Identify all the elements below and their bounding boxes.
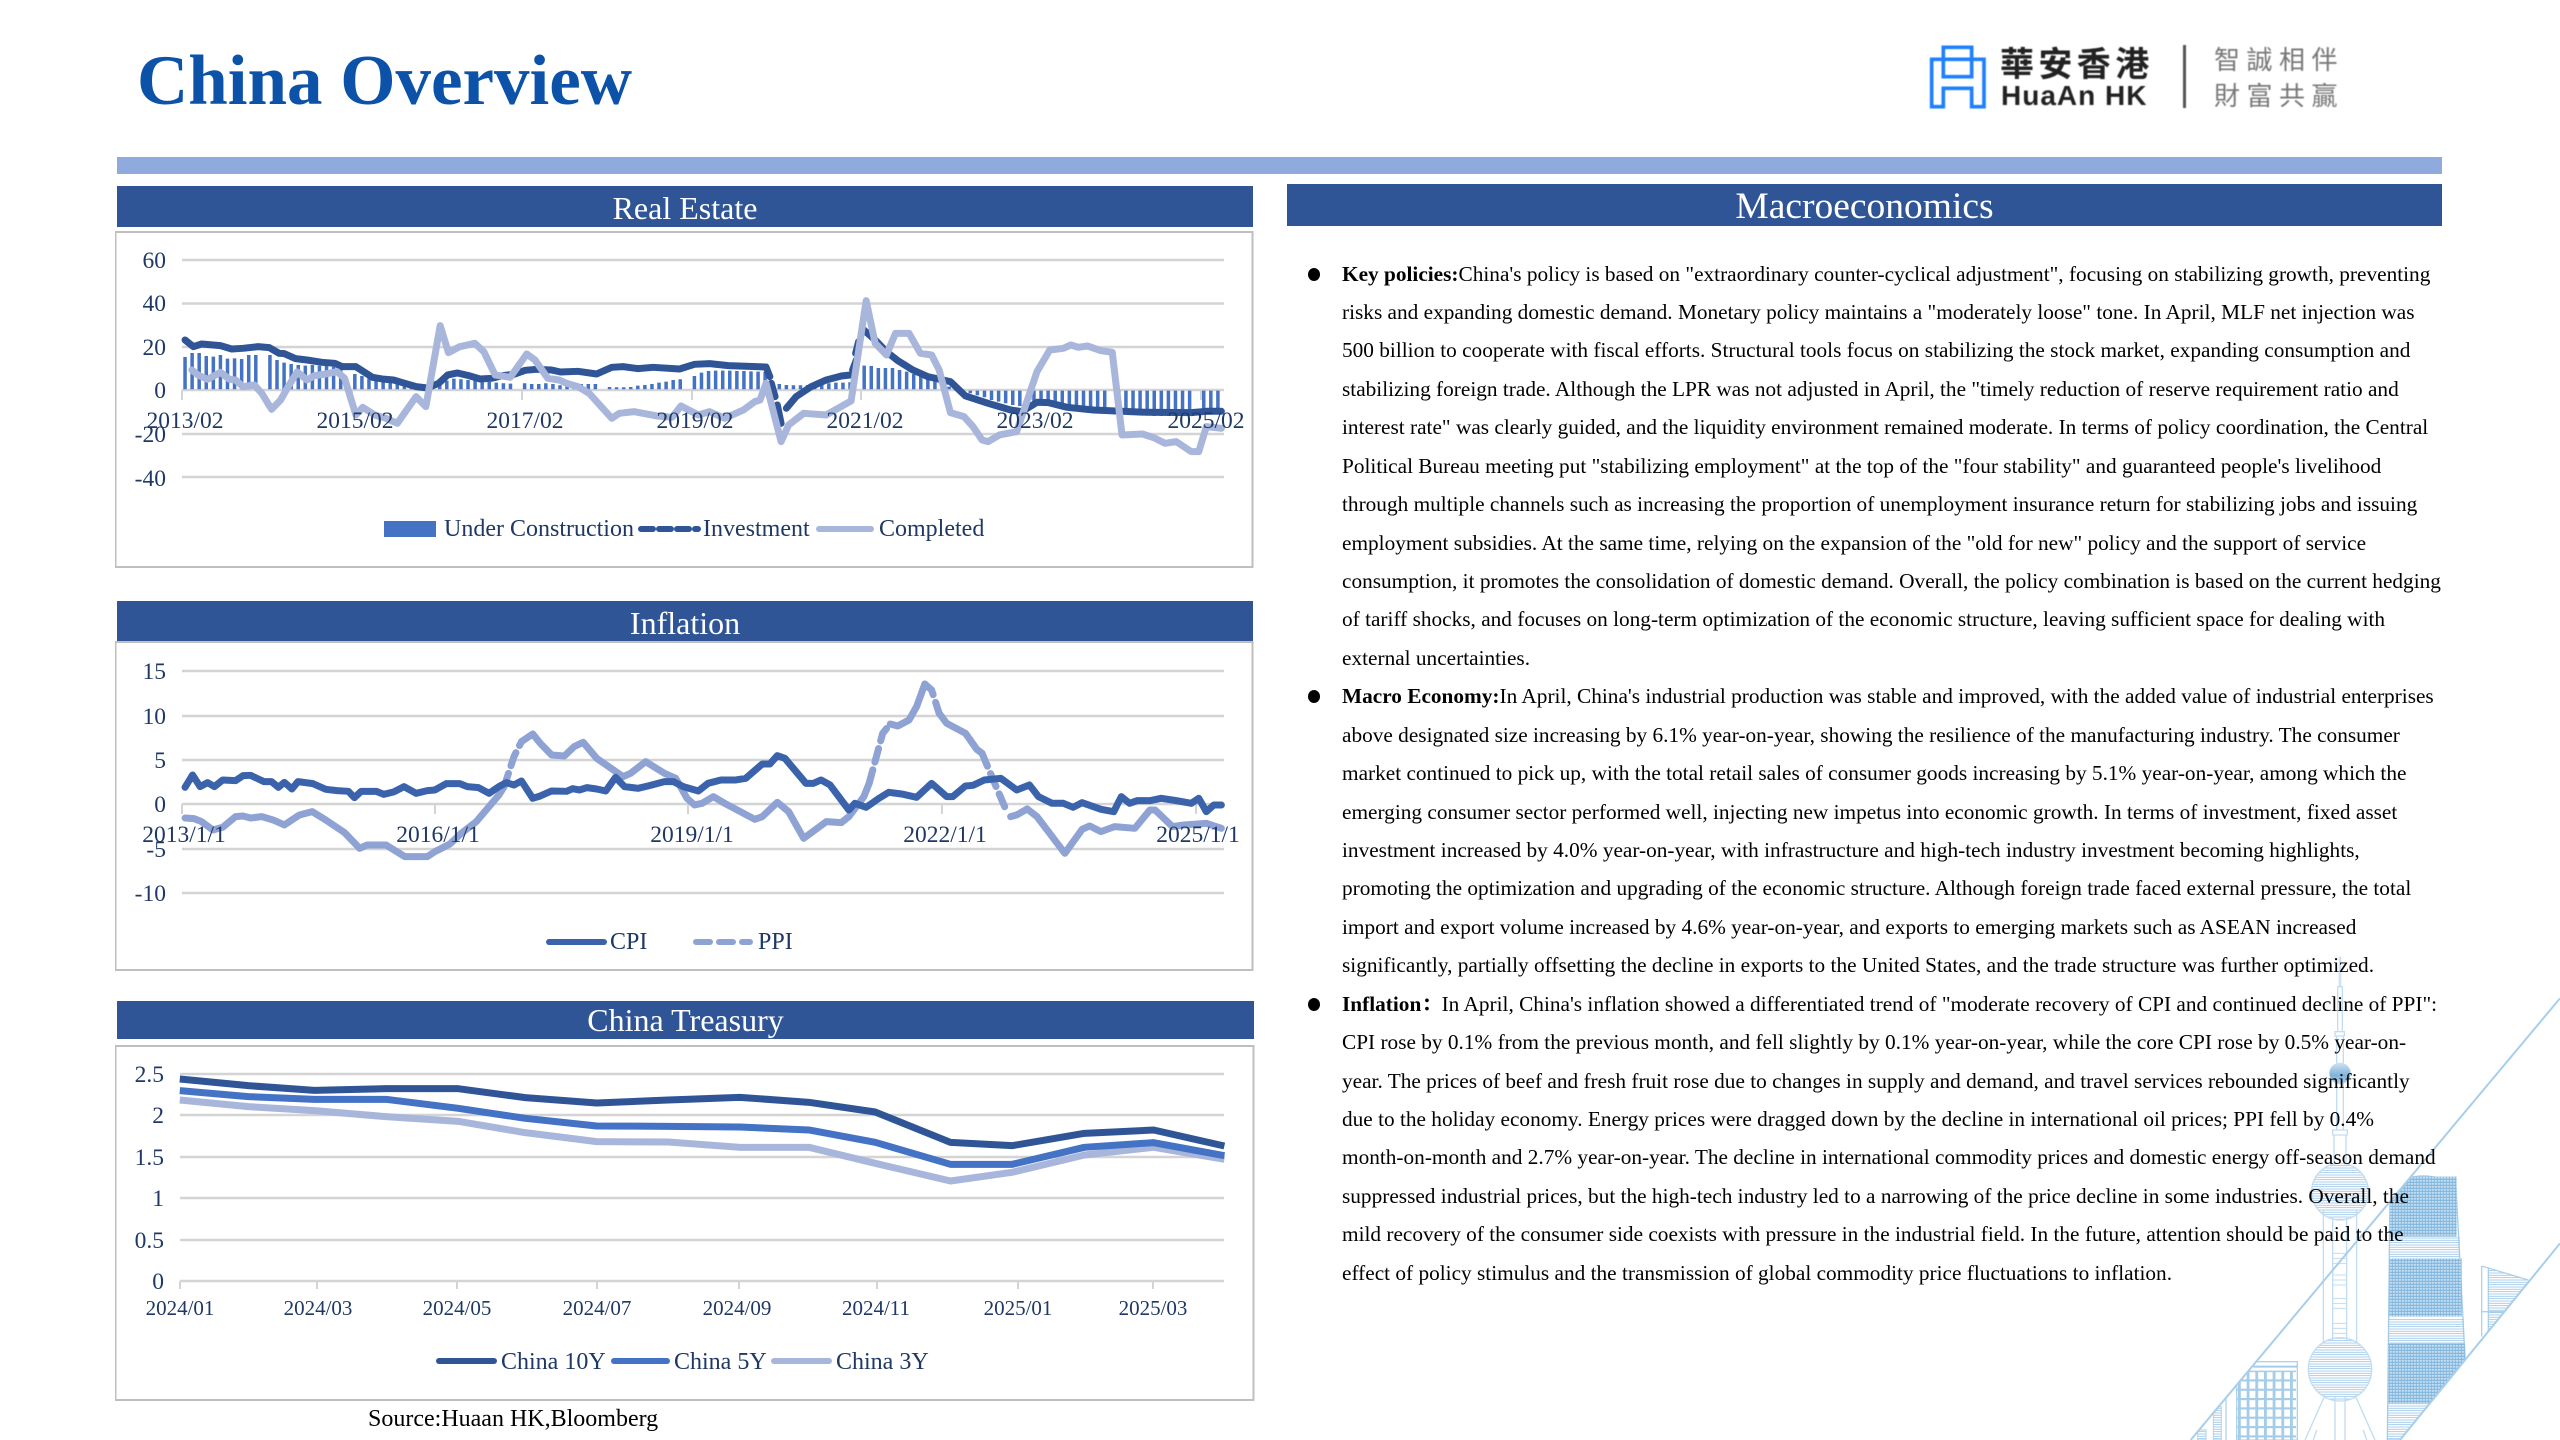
panel: Real Estate xyxy=(115,186,1254,568)
heading: Real Estate xyxy=(117,186,1253,227)
text block: Key policies: Political Bureau meeting put "stabilizing employment" at the top of the "four stability" and guaranteed people's livelihood xyxy=(1342,454,2381,478)
x axis labels: 2015/02 xyxy=(316,408,394,434)
y axis labels: 15 xyxy=(142,659,166,685)
panel: China Treasury xyxy=(115,1001,1254,1401)
y axis labels: 2.5 xyxy=(135,1062,164,1088)
y axis labels: 0 xyxy=(154,378,166,404)
text block: Key policies: Key policies:China's policy is based on "extraordinary counter-cyclical adjustment", focusing on stabilizing growth, preventing xyxy=(1342,262,2430,286)
x axis labels: 2016/1/1 xyxy=(396,822,480,848)
x axis labels: 2024/07 xyxy=(563,1296,631,1320)
logo: HuaAn HK xyxy=(1929,37,2344,113)
x axis labels: 2019/1/1 xyxy=(650,822,734,848)
x axis labels: 2025/1/1 xyxy=(1156,822,1240,848)
bullet marker xyxy=(1308,690,1320,703)
text block: Key policies: external uncertainties. xyxy=(1342,646,1530,670)
panel heading: Macroeconomics xyxy=(1287,184,2442,226)
x axis labels: 2025/03 xyxy=(1119,1296,1187,1320)
x axis labels: 2023/02 xyxy=(996,408,1074,434)
legend: Investment xyxy=(703,516,810,542)
text block: Key policies xyxy=(1308,262,2441,670)
legend: Completed xyxy=(879,516,984,542)
x axis labels: 2019/02 xyxy=(656,408,734,434)
text block: Macro Economy: above designated size increasing by 6.1% year-on-year, showing the resilience of the manufacturing industry. The consumer xyxy=(1342,723,2400,747)
y axis labels xyxy=(135,659,166,907)
y axis labels: -40 xyxy=(135,466,166,492)
logo Chinese name: 華安香港 xyxy=(2000,37,2154,86)
text block: Key policies: interest rate" was clearly guided, and the liquidity environment remained moderate. In terms of policy coordination, the Central xyxy=(1342,415,2428,439)
legend xyxy=(439,1349,929,1375)
bullet marker xyxy=(1308,268,1320,281)
y axis labels: 20 xyxy=(142,335,166,361)
text block: Inflation: Inflation：In April, China's inflation showed a differentiated trend of "moderate recovery of CPI and continued decline of PPI": xyxy=(1342,992,2437,1016)
bars: Under Construction xyxy=(185,353,1218,416)
x axis labels xyxy=(146,1296,1187,1320)
logo English name: HuaAn HK xyxy=(2001,80,2147,111)
text block: Inflation: due to the holiday economy. Energy prices were dragged down by the decline in international oil prices; PPI fell by 0.4% xyxy=(1342,1107,2374,1131)
y axis labels: 1.5 xyxy=(135,1145,164,1171)
text block: Inflation: mild recovery of the consumer side coexists with pressure in the industrial field. In the future, attention should be paid to the xyxy=(1342,1222,2404,1246)
x axis labels: 2017/02 xyxy=(486,408,564,434)
text block: Macro Economy: Macro Economy:In April, China's industrial production was stable and improved, with the added value of industrial enterprises xyxy=(1342,684,2434,708)
text block: Inflation: month-on-month and 2.7% year-on-year. The decline in international commodity prices and domestic energy off-season demand xyxy=(1342,1145,2436,1169)
y axis labels: 40 xyxy=(142,291,166,317)
line: Investment xyxy=(185,330,1221,423)
x axis labels xyxy=(142,822,1240,848)
text block: Key policies: of tariff shocks, and focuses on long-term optimization of the economic structure, leaving sufficient space for dealing with xyxy=(1342,607,2385,631)
heading: Inflation: Inflation xyxy=(630,605,740,641)
legend: PPI xyxy=(758,929,793,955)
heading: Inflation xyxy=(117,601,1253,641)
x axis labels: 2025/01 xyxy=(984,1296,1052,1320)
y axis labels: -20 xyxy=(135,422,166,448)
y axis labels: 10 xyxy=(142,704,166,730)
title: China Overview xyxy=(137,42,632,120)
text block: Macro Economy: significantly, partially offsetting the decline in exports to the United States, and the trade structure was further optimized. xyxy=(1342,953,2374,977)
text block: Key policies: risks and expanding domestic demand. Monetary policy maintains a "moderately loose" tone. In April, MLF net injection was xyxy=(1342,300,2415,324)
text block: Macro Economy: investment increased by 4.0% year-on-year, with infrastructure and high-tech industry investment becoming highlights, xyxy=(1342,838,2360,862)
source note: Source:Huaan HK,Bloomberg xyxy=(368,1406,658,1432)
y axis labels xyxy=(135,1062,164,1295)
y axis labels: 2 xyxy=(152,1103,164,1129)
panel heading: Macroeconomics: Macroeconomics xyxy=(1735,186,1994,226)
x axis labels: 2013/1/1 xyxy=(142,822,226,848)
text block: Key policies: consumption, it promotes the consolidation of domestic demand. Overall, the policy combination is based on the current hedging xyxy=(1342,569,2441,593)
heading: China Treasury xyxy=(117,1001,1254,1039)
line: CPI xyxy=(185,756,1221,812)
y axis labels: 0 xyxy=(154,792,166,818)
y axis labels: -5 xyxy=(146,837,166,863)
logo divider xyxy=(2183,45,2186,108)
logo slogan: 智誠相伴 xyxy=(2214,40,2344,77)
legend: Under Construction xyxy=(444,516,634,542)
panel: Inflation xyxy=(115,601,1254,971)
legend: China 10Y xyxy=(501,1349,606,1375)
x axis labels: 2022/1/1 xyxy=(903,822,987,848)
legend xyxy=(549,929,793,955)
chart: real estate line and bar chart xyxy=(115,231,1254,568)
x axis labels: 2024/01 xyxy=(146,1296,214,1320)
chart: treasury yields line chart xyxy=(115,1045,1254,1401)
legend xyxy=(384,516,984,542)
text block: Inflation xyxy=(1308,992,2437,1285)
x axis labels: 2025/02 xyxy=(1167,408,1245,434)
text block: Macro Economy: market continued to pick up, with the total retail sales of consumer goods increasing by 5.1% year-on-year, among which the xyxy=(1342,761,2406,785)
heading: Real Estate: Real Estate xyxy=(613,190,757,226)
text block: Inflation: CPI rose by 0.1% from the previous month, and fell slightly by 0.1% year-on-year, while the core CPI rose by 0.5% year-on- xyxy=(1342,1030,2406,1054)
line: China 3Y xyxy=(180,1100,1224,1181)
text block: Macro Economy xyxy=(1308,684,2434,977)
text block: Key policies: stabilizing foreign trade. Although the LPR was not adjusted in April, the "timely reduction of reserve requirement ratio and xyxy=(1342,377,2399,401)
legend: CPI xyxy=(610,929,647,955)
chart: CPI and PPI line chart xyxy=(115,641,1254,971)
text block: Macro Economy: promoting the optimization and upgrading of the economic structure. Although foreign trade faced external pressure, the total xyxy=(1342,876,2411,900)
x axis labels: 2024/09 xyxy=(703,1296,771,1320)
x axis labels: 2021/02 xyxy=(826,408,904,434)
y axis labels: 1 xyxy=(152,1186,164,1212)
heading: China Treasury: China Treasury xyxy=(587,1002,784,1038)
line: PPI xyxy=(185,684,1221,857)
y axis labels: 0 xyxy=(152,1269,164,1295)
logo slogan xyxy=(2214,40,2344,113)
x axis labels xyxy=(146,408,1245,434)
x axis labels: 2024/05 xyxy=(423,1296,491,1320)
top divider band xyxy=(117,157,2442,174)
text block: Inflation: suppressed industrial prices, but the high-tech industry led to a narrowing of the price decline in some industries. Overall, the xyxy=(1342,1184,2409,1208)
line: China 5Y xyxy=(180,1091,1224,1164)
line: Completed xyxy=(192,301,1221,452)
text block: Key policies: employment subsidies. At the same time, relying on the expansion of the "old for new" policy and the support of service xyxy=(1342,531,2366,555)
icon: logo mark xyxy=(1929,44,1987,110)
bullet marker xyxy=(1308,998,1320,1011)
logo slogan: 財富共贏 xyxy=(2214,76,2344,113)
y axis labels: 60 xyxy=(142,248,166,274)
text block: Key policies: 500 billion to cooperate with fiscal efforts. Structural tools focus on stabilizing the stock market, expanding consumption and xyxy=(1342,338,2410,362)
y axis labels: 5 xyxy=(154,748,166,774)
legend: China 3Y xyxy=(836,1349,929,1375)
y axis labels: 0.5 xyxy=(135,1228,164,1254)
x axis labels: 2024/11 xyxy=(842,1296,910,1320)
text block: Inflation: year. The prices of beef and fresh fruit rose due to changes in supply and demand, and travel services rebounded significantly xyxy=(1342,1069,2410,1093)
y axis labels: -10 xyxy=(135,881,166,907)
text block: Macro Economy: emerging consumer sector performed well, injecting new impetus into economic growth. In terms of investment, fixed asset xyxy=(1342,800,2397,824)
x axis labels: 2013/02 xyxy=(146,408,224,434)
line: China 10Y xyxy=(180,1079,1224,1146)
legend: China 5Y xyxy=(674,1349,767,1375)
text block: Key policies: through multiple channels such as increasing the proportion of unemployment insurance return for stabilizing jobs and issuing xyxy=(1342,492,2417,516)
text block: Inflation: effect of policy stimulus and the transmission of global commodity price fluctuations to inflation. xyxy=(1342,1261,2172,1285)
background skyline illustration xyxy=(2190,956,2560,1440)
text block: Macro Economy: import and export volume increased by 4.6% year-on-year, and exports to emerging markets such as ASEAN increased xyxy=(1342,915,2356,939)
x axis labels: 2024/03 xyxy=(284,1296,352,1320)
y axis labels xyxy=(135,248,166,492)
